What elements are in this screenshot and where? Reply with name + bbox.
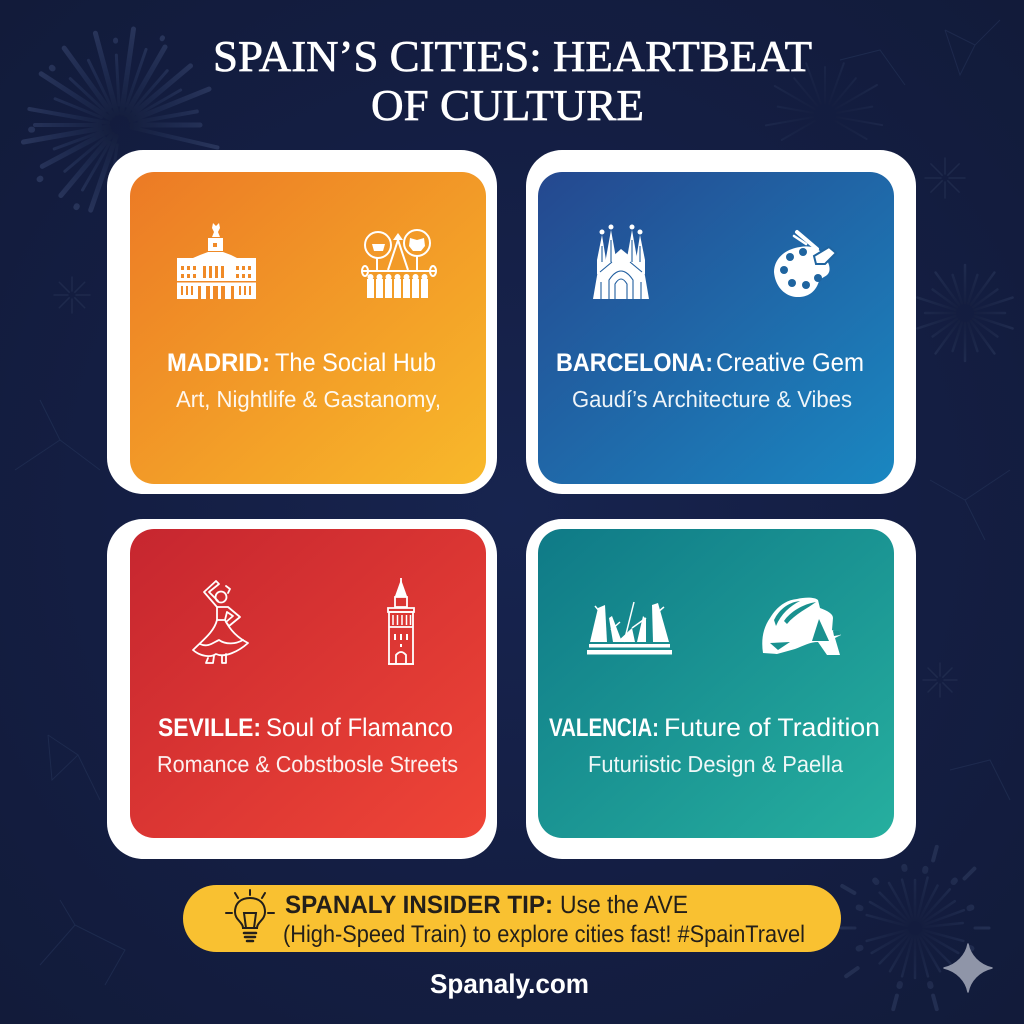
title: SPAIN’S CITIES: HEARTBEAT xyxy=(213,32,812,81)
icon: royal palace xyxy=(177,223,256,299)
title: OF CULTURE xyxy=(371,81,644,130)
panel: Barcelona xyxy=(526,150,916,494)
heading: Seville: SEVILLE: xyxy=(158,714,261,742)
text: tip line one: Use the AVE xyxy=(560,891,688,919)
text: tip line two: (High-Speed Train) to explore cities fast! #SpainTravel xyxy=(283,921,805,948)
heading: Madrid: MADRID: xyxy=(167,349,270,377)
icon: sparkle xyxy=(944,944,992,992)
heading: Barcelona xyxy=(556,349,864,377)
heading: Madrid xyxy=(167,349,436,377)
heading: Seville xyxy=(158,714,453,742)
icon: opera house xyxy=(762,598,841,655)
title xyxy=(213,32,812,130)
panel: Valencia xyxy=(526,519,916,859)
icon: modern bridge xyxy=(587,602,672,654)
heading: Seville: Soul of Flamanco xyxy=(266,714,453,742)
icon: crowd with food and art xyxy=(362,230,436,298)
firework: bottom right xyxy=(841,847,989,1009)
panel: Seville xyxy=(107,519,497,859)
heading: Barcelona: BARCELONA: xyxy=(556,349,713,377)
icon: flamenco dancer xyxy=(193,581,248,663)
icon: artist palette xyxy=(774,232,836,297)
website label: Spanaly.com xyxy=(430,969,589,999)
icon: Giralda tower xyxy=(388,578,414,664)
heading: Valencia: VALENCIA: xyxy=(549,714,659,742)
text: Madrid subtitle: Art, Nightlife & Gastanomy, xyxy=(176,386,441,412)
callout: insider tip xyxy=(183,885,841,952)
text: Barcelona subtitle: Gaudí’s Architecture & Vibes xyxy=(572,386,852,412)
icon: Sagrada Familia xyxy=(593,224,649,299)
text: Valencia subtitle: Futuriistic Design & Paella xyxy=(588,751,843,777)
icon: light bulb xyxy=(226,890,274,941)
small fireworks xyxy=(54,158,965,697)
heading: Valencia xyxy=(549,714,880,742)
text: Seville subtitle: Romance & Cobstbosle Streets xyxy=(157,751,458,777)
heading: Valencia: Future of Tradition xyxy=(664,714,880,742)
firework: top right xyxy=(766,63,882,140)
firework: right middle xyxy=(917,265,1013,361)
panel: Madrid xyxy=(107,150,497,494)
heading: Madrid: The Social Hub xyxy=(275,349,436,377)
heading: Barcelona: Creative Gem xyxy=(716,349,864,377)
text: tip line one: SPANALY INSIDER TIP: xyxy=(285,891,553,919)
text: tip line one xyxy=(285,891,688,919)
firework: top left xyxy=(23,29,217,210)
